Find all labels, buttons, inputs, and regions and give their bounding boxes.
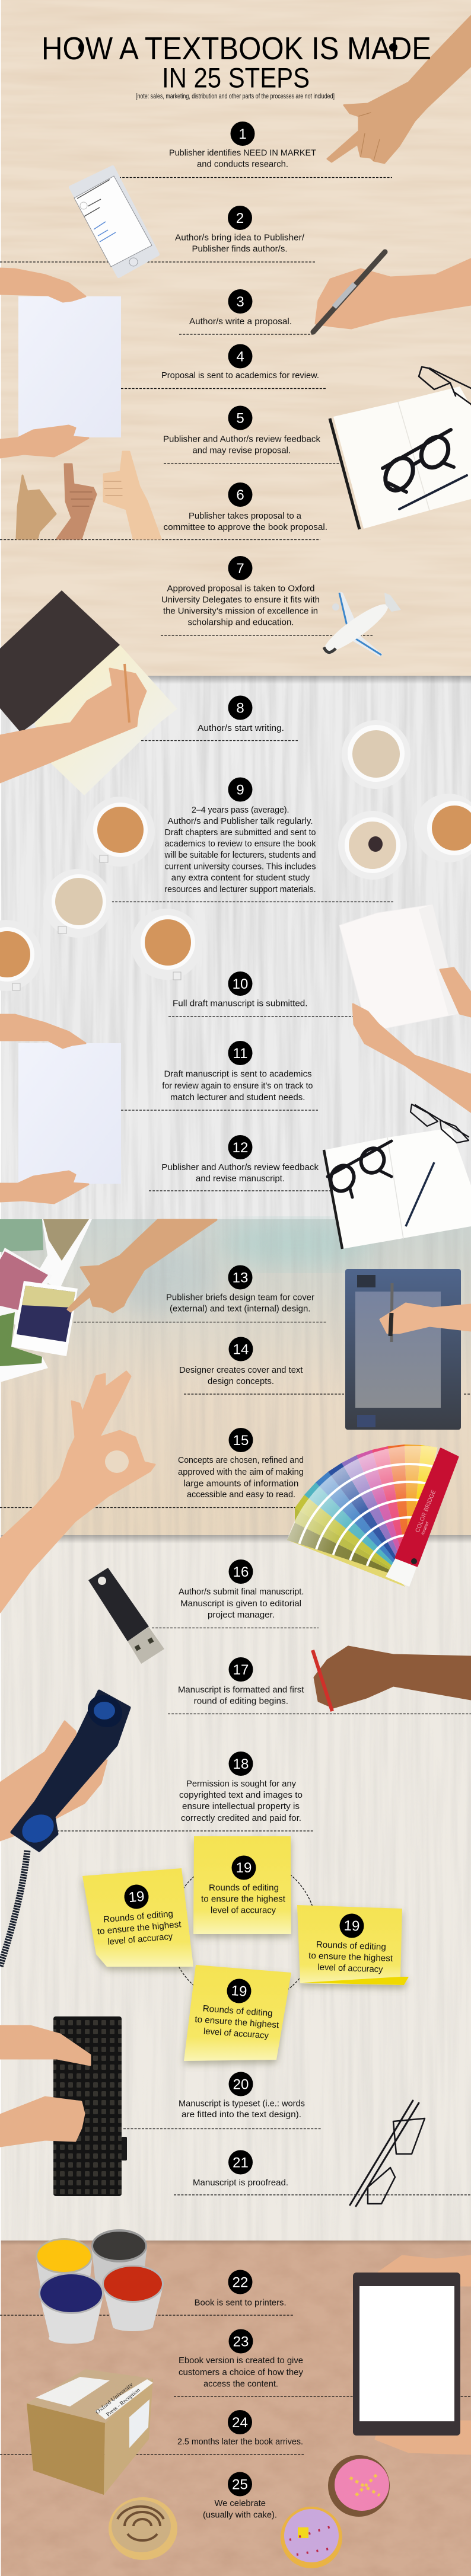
step 16 <box>179 1559 304 1620</box>
icon: graphics tablet with hand and stylus <box>345 1269 471 1430</box>
sticky note: top <box>193 1836 291 1934</box>
icon: pointing hand at photographs <box>68 1220 217 1312</box>
icon: cardboard parcel: Oxford University <box>94 2382 135 2415</box>
icon: hands holding manuscript <box>339 905 471 1112</box>
step 20: 20 <box>233 2077 249 2092</box>
step 7 <box>161 556 320 627</box>
sticky note: top: Rounds of editing <box>209 1883 279 1893</box>
step 21: 21 <box>233 2155 249 2171</box>
step 2: 2 <box>236 210 244 226</box>
sticky note: right: Rounds of editing <box>316 1939 386 1952</box>
sticky note: top: to ensure the highest <box>201 1894 286 1904</box>
step 14: 14 <box>233 1342 249 1357</box>
step 10: Full draft manuscript is submitted. <box>173 998 307 1009</box>
step 2 <box>175 206 305 254</box>
step 18: ensure intellectual property is <box>182 1801 300 1811</box>
sticky note: right <box>297 1905 409 1985</box>
step 18: correctly credited and paid for. <box>181 1813 301 1823</box>
icon: tablet held by two hands <box>353 2256 471 2454</box>
step 22 <box>195 2270 287 2307</box>
sticky note: left <box>82 1868 193 1967</box>
sticky note: bottom: Rounds of editing <box>202 2003 273 2019</box>
icon: hand writing with pen <box>313 252 471 332</box>
step 25: We celebrate <box>215 2498 266 2508</box>
icon: coffee cup left <box>85 797 155 867</box>
step 16: project manager. <box>208 1610 275 1620</box>
step 9: academics to review to ensure the book <box>165 839 316 849</box>
step 9: will be suitable for lecturers, students and <box>164 850 316 860</box>
sticky note: bottom: level of accuracy <box>203 2027 269 2041</box>
step 23 <box>179 2329 303 2389</box>
step 14: design concepts. <box>208 1376 274 1386</box>
icon: glasses top right <box>419 367 471 404</box>
background: blue-to-tan wood section <box>0 1219 471 1535</box>
step 13: 13 <box>233 1270 248 1286</box>
step 8 <box>198 696 284 733</box>
step 11 <box>162 1041 313 1102</box>
title: HOW A TEXTBOOK IS MADE <box>42 31 431 66</box>
step 15: accessible and easy to read. <box>187 1490 295 1500</box>
step 8: Author/s start writing. <box>198 723 284 733</box>
step 12: and revise manuscript. <box>196 1174 285 1184</box>
icon: coffee cupcake <box>109 2497 177 2560</box>
step 1: and conducts research. <box>197 159 288 170</box>
step 20: Manuscript is typeset (i.e.: words <box>179 2098 305 2109</box>
step 15: approved with the aim of making <box>178 1467 304 1477</box>
step 18: Permission is sought for any <box>186 1779 296 1789</box>
step 21: Manuscript is proofread. <box>193 2178 288 2188</box>
step 6: 6 <box>236 487 244 503</box>
step 4: 4 <box>236 349 244 365</box>
sticky note: bottom <box>184 1965 291 2061</box>
step 6: committee to approve the book proposal. <box>164 522 327 532</box>
step 14: Designer creates cover and text <box>179 1365 303 1375</box>
step 9: resources and lecturer support materials. <box>165 884 316 894</box>
step 13: (external) and text (internal) design. <box>170 1304 311 1314</box>
step 15: large amounts of information <box>183 1478 298 1488</box>
icon: coffee cup left edge <box>0 920 42 991</box>
step 3: Author/s write a proposal. <box>189 317 292 327</box>
icon: coffee cup top right <box>342 720 410 789</box>
icon: pointing hand top right <box>327 16 471 163</box>
background: tan wood section <box>0 0 471 676</box>
step 20 <box>179 2072 305 2120</box>
icon: hand with red pencil <box>313 1647 471 1711</box>
icon: smartphone <box>71 167 158 276</box>
icon: scattered photographs <box>0 1219 92 1382</box>
step 15: Concepts are chosen, refined and <box>178 1455 304 1465</box>
step 18: 18 <box>233 1756 249 1772</box>
icon: hand writing in dark notebook <box>0 590 177 795</box>
dashed editing cycle ring <box>170 1858 317 2005</box>
step 7: the University’s mission of excellence in <box>163 606 318 616</box>
sticky note: right: 19 <box>343 1918 360 1934</box>
step 3: 3 <box>236 294 244 310</box>
icon: cardboard parcel <box>27 2369 153 2495</box>
step 5: 5 <box>236 410 244 427</box>
sticky note: left: to ensure the highest <box>97 1919 182 1936</box>
background: pale wood section <box>0 1535 471 2241</box>
step 12 <box>161 1135 319 1184</box>
sticky note: bottom: to ensure the highest <box>195 2014 280 2030</box>
step 6: Publisher takes proposal to a <box>189 511 302 521</box>
step 14 <box>179 1337 303 1386</box>
step 15: 15 <box>233 1433 249 1449</box>
step 9: 9 <box>236 782 244 798</box>
icon: telephone handset with cord <box>0 1689 129 1967</box>
step 11: for review again to ensure it’s on track to <box>162 1081 313 1091</box>
sticky note: left: level of accuracy <box>107 1931 173 1947</box>
step 16: Manuscript is given to editorial <box>180 1599 301 1609</box>
step 7: University Delegates to ensure it fits with <box>161 595 320 605</box>
icon: coffee cup foam <box>43 869 112 938</box>
icon: toy airplane <box>319 592 401 659</box>
step 11: 11 <box>233 1046 247 1062</box>
sticky note: right: to ensure the highest <box>308 1951 393 1964</box>
step 25: 25 <box>232 2476 248 2493</box>
sticky note: left: 19 <box>128 1888 145 1906</box>
subtitle note: [note: sales, marketing, distribution and other parts of the processes are not included] <box>136 92 335 100</box>
step 11: match lecturer and student needs. <box>170 1092 305 1102</box>
step 24 <box>177 2410 303 2447</box>
icon: hands holding paper (proposal) <box>0 269 121 458</box>
background: kraft paper section <box>0 2241 471 2576</box>
icon: purple cupcake <box>281 2507 342 2568</box>
icon: colour swatch fan: COLOR BRIDGE <box>415 1489 437 1533</box>
step 9: 2–4 years pass (average). <box>192 805 289 815</box>
step 9: current university courses. This includes <box>165 862 316 872</box>
step 18 <box>179 1752 303 1823</box>
sticky note: top: 19 <box>236 1860 252 1876</box>
step 7: Approved proposal is taken to Oxford <box>167 584 314 594</box>
step 16: 16 <box>233 1564 249 1580</box>
step 2: Author/s bring idea to Publisher/ <box>175 233 305 243</box>
icon: open notebook with glasses and pen <box>330 386 471 529</box>
icon: printing ink tins <box>36 2229 164 2344</box>
icon: notebook with glasses and pen (revise) <box>324 1128 471 1249</box>
icon: keyboard with typing hands <box>0 2016 127 2196</box>
icon: folded glasses <box>350 2101 425 2206</box>
step 25: (usually with cake). <box>203 2510 277 2520</box>
step 20: are fitted into the text design). <box>182 2110 301 2120</box>
step 13 <box>166 1265 314 1314</box>
icon: coffee cup right edge <box>414 794 471 862</box>
step 18: copyrighted text and images to <box>179 1790 303 1800</box>
icon: colour swatch fan: /coated <box>421 1521 430 1536</box>
icon: USB memory stick <box>88 1568 164 1664</box>
sticky note: top: level of accuracy <box>211 1905 276 1916</box>
icon: colour swatch fan <box>287 1444 459 1587</box>
icon: thumbs up hands <box>17 452 161 539</box>
step 9: Author/s and Publisher talk regularly. <box>167 816 313 826</box>
step 10 <box>173 971 307 1009</box>
step 11: Draft manuscript is sent to academics <box>164 1069 312 1079</box>
step 12: Publisher and Author/s review feedback <box>161 1162 319 1172</box>
step 22: Book is sent to printers. <box>195 2297 287 2307</box>
icon: OK hand gesture <box>0 1372 155 1612</box>
step 24: 2.5 months later the book arrives. <box>177 2437 303 2447</box>
icon: coffee cup centre <box>131 909 202 980</box>
step 4: Proposal is sent to academics for review. <box>161 370 319 381</box>
step 23: Ebook version is created to give <box>179 2356 303 2366</box>
step 5: Publisher and Author/s review feedback <box>163 434 320 445</box>
step 17: 17 <box>233 1662 249 1678</box>
icon: cardboard parcel: Press - Reception <box>106 2387 141 2418</box>
step 17 <box>178 1657 304 1706</box>
step 12: 12 <box>233 1140 248 1156</box>
step 23: 23 <box>233 2334 249 2350</box>
step 5: and may revise proposal. <box>192 446 291 455</box>
icon: hands holding paper (draft) <box>0 1015 121 1203</box>
step 5 <box>163 405 320 455</box>
step 10: 10 <box>233 976 248 992</box>
step 16: Author/s submit final manuscript. <box>179 1587 304 1597</box>
step 23: customers a choice of how they <box>179 2367 303 2377</box>
step 4 <box>161 344 319 381</box>
step 8: 8 <box>236 701 244 716</box>
step 3 <box>189 289 292 327</box>
step 21 <box>193 2150 288 2188</box>
icon: glasses above notebook <box>410 1104 469 1143</box>
step 24: 24 <box>232 2415 248 2431</box>
step 25 <box>203 2472 277 2520</box>
sticky note: left: Rounds of editing <box>103 1909 173 1925</box>
step 15 <box>178 1428 304 1500</box>
step 9: Draft chapters are submitted and sent to <box>165 827 316 838</box>
step 1 <box>169 122 316 170</box>
step 1: Publisher identifies NEED IN MARKET <box>169 148 316 158</box>
title <box>42 31 431 94</box>
step 17: round of editing begins. <box>194 1696 288 1706</box>
icon: coffee cup with dregs <box>338 811 407 880</box>
step 7: 7 <box>236 561 244 577</box>
step 7: scholarship and education. <box>187 618 294 627</box>
icon: pink cupcake <box>328 2455 390 2517</box>
step 13: Publisher briefs design team for cover <box>166 1292 314 1303</box>
title: IN 25 STEPS <box>162 62 310 94</box>
step 17: Manuscript is formatted and first <box>178 1685 304 1695</box>
sticky note: right: level of accuracy <box>317 1963 383 1974</box>
step 2: Publisher finds author/s. <box>192 244 287 254</box>
step 6 <box>164 482 327 532</box>
step 9 <box>164 778 316 894</box>
background: grey wood section <box>0 676 471 1219</box>
step 1: 1 <box>238 126 247 142</box>
step 9: any extra content for student study <box>171 873 310 883</box>
step 23: access the content. <box>203 2379 278 2389</box>
sticky note: bottom: 19 <box>231 1983 247 2000</box>
step 22: 22 <box>233 2275 248 2290</box>
